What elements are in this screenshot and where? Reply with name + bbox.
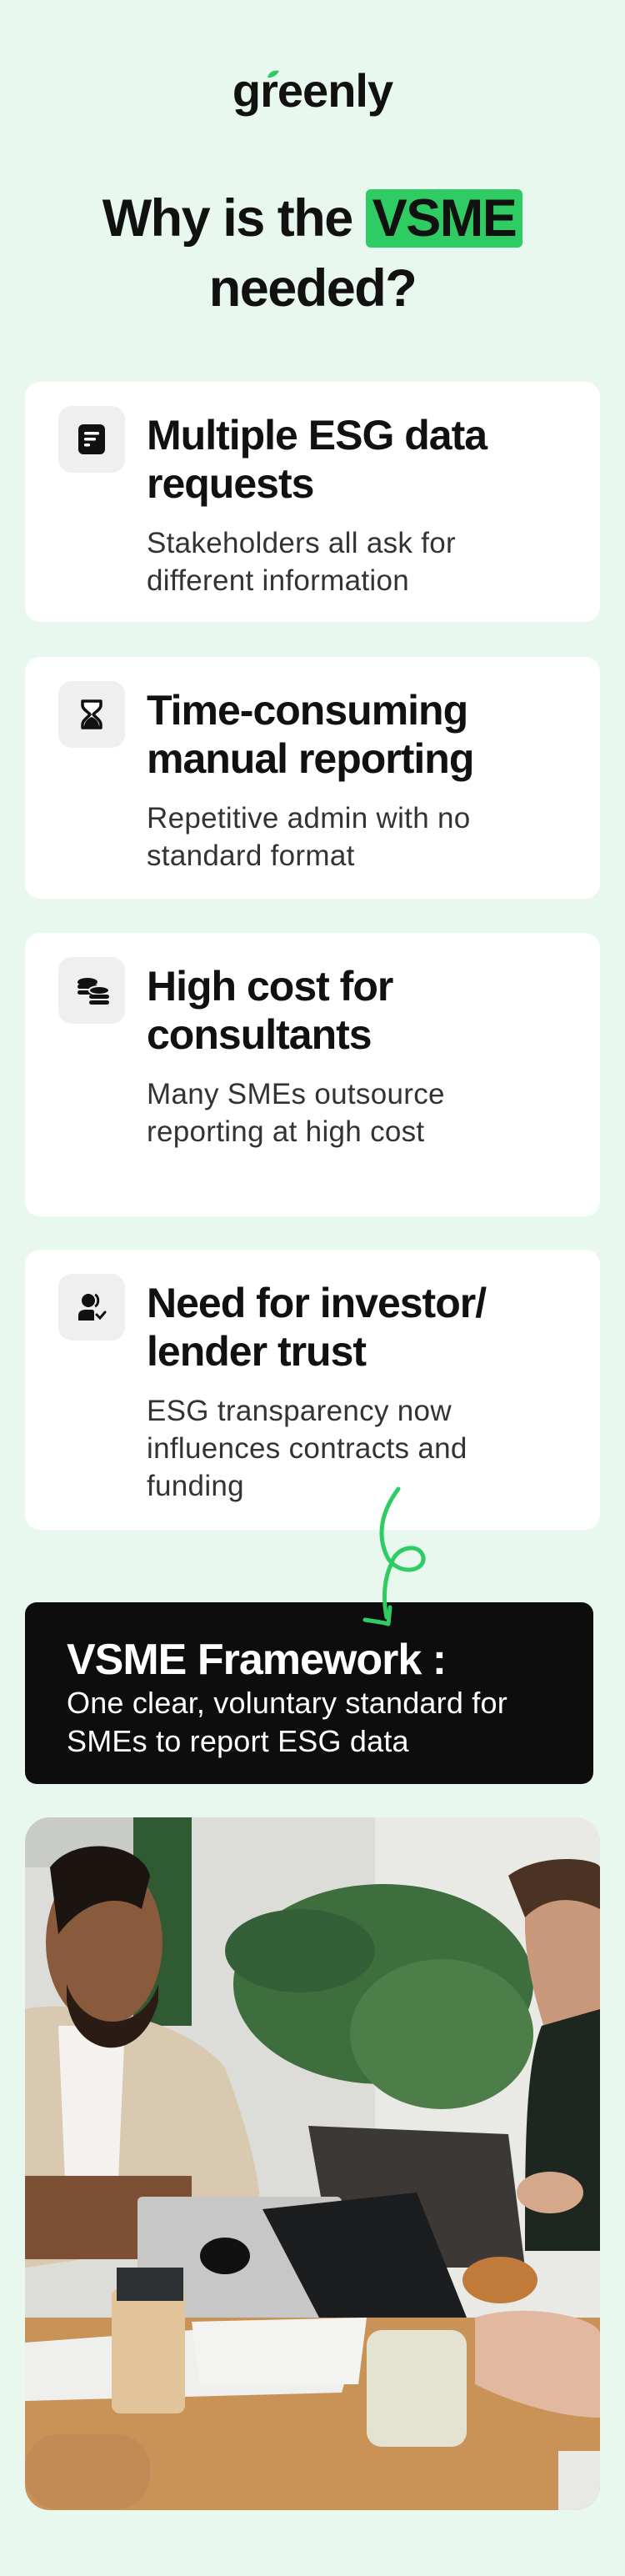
title [102, 189, 522, 318]
text: high cost: High cost for [147, 963, 392, 1010]
text: investor trust [147, 1280, 487, 1502]
text: investor trust: lender trust [147, 1328, 366, 1375]
text: framework description: One clear, voluntary standard for [67, 1686, 508, 1720]
text: time-consuming: Time-consuming [147, 687, 468, 734]
text: time-consuming [147, 687, 473, 872]
text: time-consuming: manual reporting [147, 735, 473, 782]
icon: person with check [58, 1274, 125, 1341]
text: investor trust: influences contracts and [147, 1432, 468, 1465]
text: investor trust: Need for investor/ [147, 1280, 486, 1326]
text: high cost: reporting at high cost [147, 1115, 424, 1148]
photo: team at table [25, 1817, 600, 2510]
heading: VSME framework: VSME Framework : [67, 1636, 446, 1684]
text: framework description [67, 1686, 508, 1758]
text: time-consuming: Repetitive admin with no [147, 802, 471, 834]
text: multiple ESG: Stakeholders all ask for [147, 527, 456, 559]
text: high cost [147, 963, 445, 1148]
logo: greenly [232, 64, 392, 117]
title: needed? [209, 259, 416, 318]
card: investor/lender trust [25, 1250, 600, 1530]
title: Why is the VSME [102, 189, 516, 248]
card: time-consuming manual reporting [25, 657, 600, 899]
text: investor trust: ESG transparency now [147, 1395, 452, 1427]
text: time-consuming: standard format [147, 839, 355, 872]
icon: hourglass [58, 681, 125, 748]
panel: VSME framework [25, 1602, 593, 1784]
arrow: green squiggle [363, 1487, 426, 1626]
text: multiple ESG [147, 412, 488, 597]
icon: coins [58, 957, 125, 1024]
icon: document [58, 406, 125, 473]
card: multiple ESG data requests [25, 382, 600, 622]
text: multiple ESG: requests [147, 460, 313, 507]
text: investor trust: funding [147, 1470, 244, 1502]
text: multiple ESG: Multiple ESG data [147, 412, 487, 459]
card: high cost for consultants [25, 933, 600, 1216]
text: high cost: consultants [147, 1011, 372, 1058]
text: high cost: Many SMEs outsource [147, 1078, 445, 1110]
text: multiple ESG: different information [147, 564, 409, 597]
text: framework description: SMEs to report ESG data [67, 1724, 409, 1758]
